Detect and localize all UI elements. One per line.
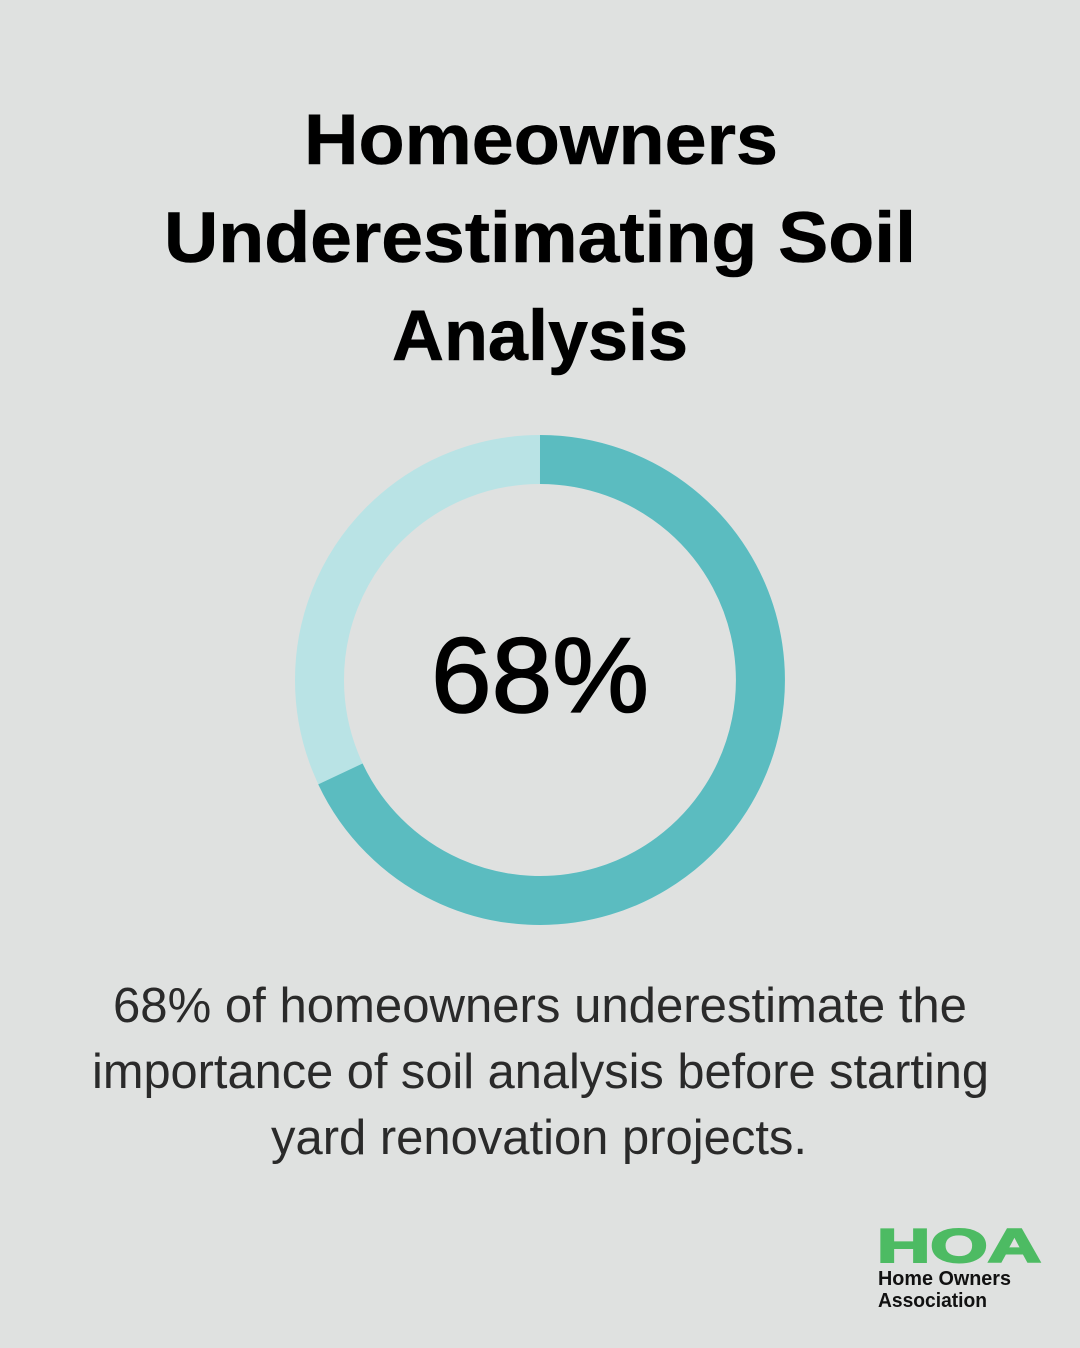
description text: yard renovation projects. <box>271 1111 807 1165</box>
logo mark: HOA: HOA <box>877 1219 1041 1272</box>
donut value: 68% <box>431 615 649 735</box>
description text: importance of soil analysis before starting <box>92 1045 989 1099</box>
donut track: remaining 32% <box>320 460 760 900</box>
donut chart: 68% <box>320 460 760 900</box>
logo wordmark: Home Owners <box>878 1268 1011 1290</box>
donut arc: 68% <box>340 460 760 900</box>
logo wordmark: Association <box>878 1290 987 1312</box>
description text <box>92 979 989 1165</box>
title <box>164 101 916 376</box>
title: Underestimating Soil <box>164 199 916 278</box>
logo: Home Owners Association <box>877 1219 1041 1312</box>
title: Analysis <box>392 297 688 376</box>
description text: 68% of homeowners underestimate the <box>113 979 967 1033</box>
logo wordmark <box>878 1268 1011 1312</box>
title: Homeowners <box>304 101 778 180</box>
